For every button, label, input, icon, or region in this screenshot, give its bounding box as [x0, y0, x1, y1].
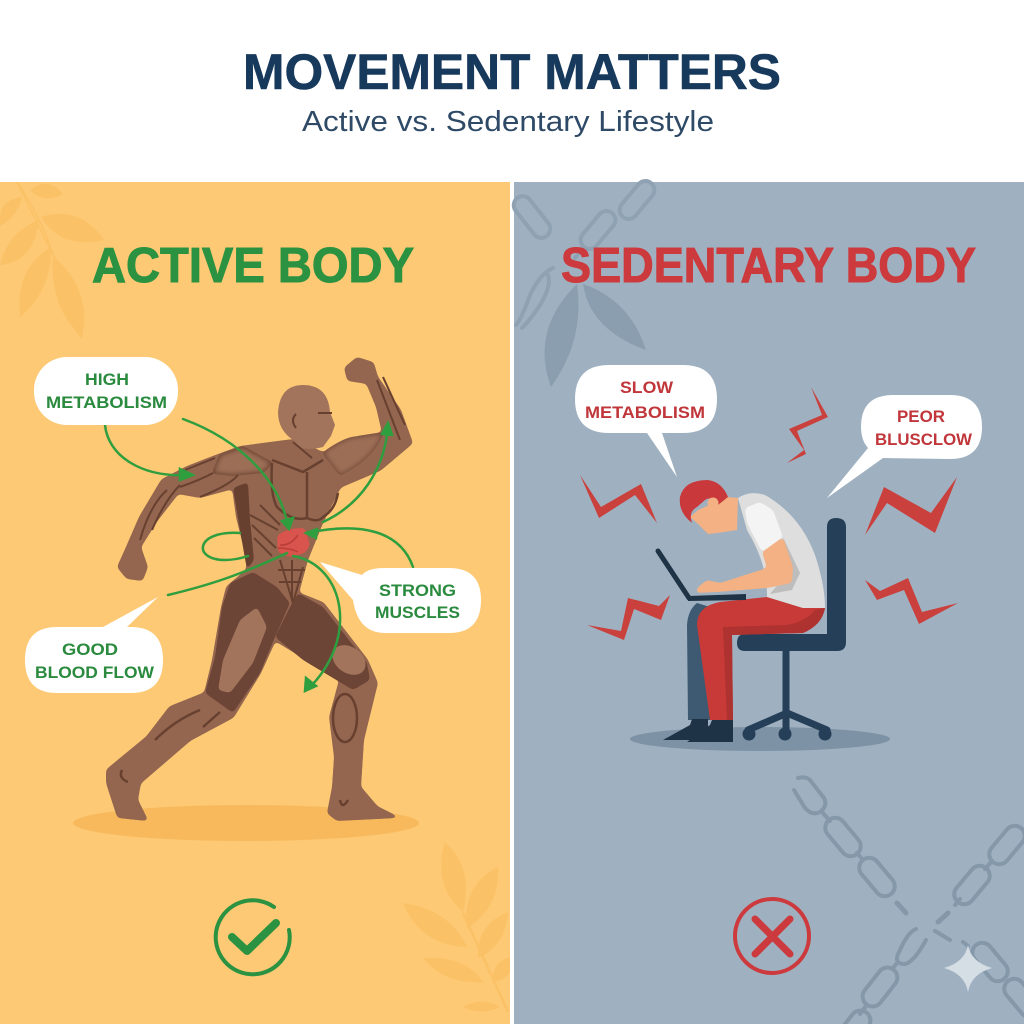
title: MOVEMENT MATTERS — [243, 44, 781, 100]
callout: slow metabolism: METABOLISM — [585, 403, 705, 422]
side torso — [233, 482, 254, 570]
floor shadow — [630, 727, 890, 751]
callout: slow metabolism: SLOW — [620, 378, 674, 397]
lower leg muscles — [333, 694, 357, 742]
arrow: muscles to organ — [306, 528, 413, 567]
subtitle: Active vs. Sedentary Lifestyle — [302, 106, 714, 138]
head and neck — [690, 497, 738, 534]
sparkle — [944, 945, 992, 992]
callout: high metabolism: HIGH — [85, 370, 129, 389]
hip and left thigh — [205, 572, 290, 713]
shirt — [738, 493, 825, 608]
callout: good blood flow: GOOD — [62, 640, 118, 659]
callout: strong muscles: STRONG — [379, 581, 456, 600]
callout: poor blood flow: PEOR — [897, 407, 945, 426]
callout: strong muscles — [320, 562, 481, 633]
trousers — [697, 597, 825, 720]
head — [278, 385, 335, 449]
heading: sedentary body: SEDENTARY BODY — [561, 239, 976, 293]
ground shadow — [73, 805, 419, 841]
arrow: side loop — [203, 533, 248, 560]
right thigh — [275, 593, 370, 690]
arrow: organ to leg — [293, 556, 340, 691]
trouser shading — [723, 608, 825, 720]
shoulder and chest muscles — [213, 447, 272, 475]
callout: good blood flow — [25, 597, 163, 693]
green arrows — [105, 419, 413, 691]
decorative chains: top left — [510, 177, 658, 328]
sleeve — [745, 502, 783, 552]
office chair — [737, 518, 846, 740]
stress zigzags — [580, 387, 958, 640]
icon: cross mark — [735, 899, 809, 973]
callout: slow metabolism — [575, 365, 717, 477]
muscular figure — [107, 358, 412, 820]
arrow: blood flow to organ — [168, 553, 287, 595]
callout: high metabolism — [34, 357, 178, 425]
callout: strong muscles: MUSCLES — [375, 603, 460, 622]
seated figure at laptop — [630, 480, 890, 751]
callout: poor blood flow — [827, 395, 982, 498]
arm muscles — [140, 377, 405, 540]
icon: check mark — [216, 900, 290, 974]
heading: active body: ACTIVE BODY — [92, 239, 414, 293]
laptop — [658, 551, 746, 601]
callout: high metabolism: METABOLISM — [46, 393, 167, 412]
ab lines — [250, 505, 305, 603]
decorative leaves: bottom right — [403, 842, 510, 1012]
arm — [695, 537, 793, 593]
hair — [680, 480, 728, 523]
shoes — [663, 719, 733, 742]
ear — [708, 498, 718, 508]
decorative chains: bottom right — [794, 777, 1024, 1024]
decorative leaves — [545, 284, 646, 387]
decorative leaves: top left — [0, 182, 104, 337]
far leg — [687, 603, 710, 720]
callout: good blood flow: BLOOD FLOW — [35, 663, 155, 682]
callout: poor blood flow: BLUSCLOW — [875, 430, 973, 449]
arrow: metabolism to organ — [183, 419, 293, 529]
panel: active body — [0, 182, 510, 1024]
panel: sedentary body — [510, 177, 1024, 1024]
body silhouette — [107, 358, 412, 820]
arrow: metabolism to arm — [105, 425, 193, 480]
arrow: organ to raised arm — [323, 423, 392, 522]
highlighted organ — [277, 528, 310, 557]
